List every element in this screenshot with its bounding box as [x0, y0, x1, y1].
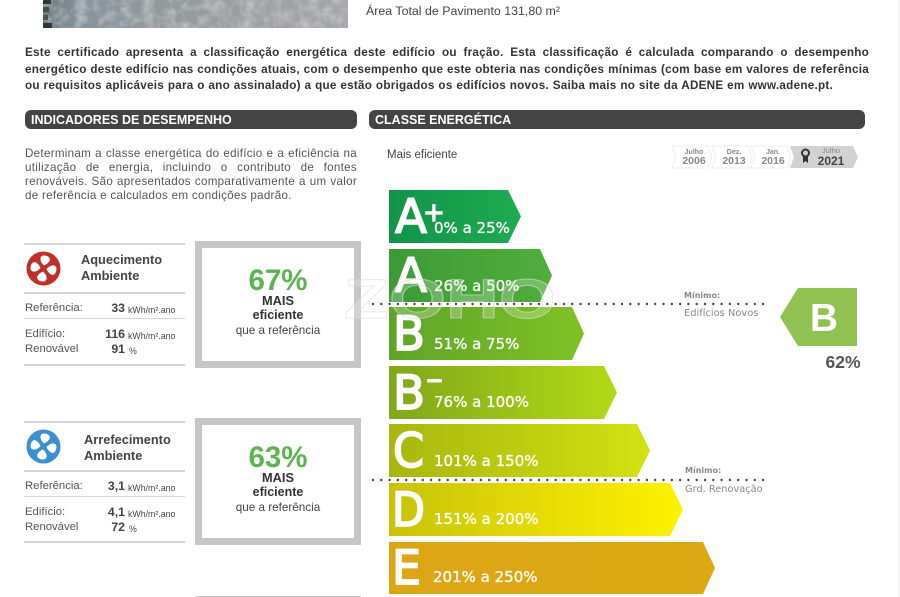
- building photo: [43, 0, 348, 28]
- description text: Determinam a classe energética do edifício e a eficiência na: [25, 147, 357, 160]
- heading: indicadores de desempenho: [25, 110, 357, 129]
- panel: aquecimento ambiente: 91: [111, 342, 125, 356]
- row: referência: Referência:: [25, 302, 83, 314]
- timeline of regulations: Julho: [685, 149, 703, 156]
- timeline of regulations: 2013: [722, 155, 746, 167]
- bar: A+: [389, 190, 521, 245]
- bar: A: [389, 249, 552, 304]
- heading: aquecimento: Aquecimento: [81, 252, 162, 267]
- bar: A: 26% a 50%: [434, 277, 519, 295]
- panel: aquecimento ambiente: %: [129, 346, 137, 356]
- panel: arrefecimento ambiente: 3,1: [108, 479, 125, 493]
- bar: E: [389, 541, 715, 596]
- current class badge: B: [780, 288, 857, 346]
- timeline of regulations: 2006: [682, 155, 706, 167]
- panel: arrefecimento ambiente: kWh/m².ano: [128, 483, 175, 493]
- marker: minimum new buildings: Mínimo:: [684, 291, 720, 300]
- current class badge: B: B: [810, 297, 838, 340]
- timeline of regulations: 2021: [818, 154, 845, 168]
- row: edifício: Edifício:: [25, 506, 65, 518]
- intro paragraph: ou requisitos aplicáveis para o ano assinalado) a que estão obrigados os edifícios novos. Saiba mais no site da ADENE em www.adene.pt.: [25, 79, 833, 92]
- callout: 63%: 63%: [248, 441, 308, 474]
- row: referência: Referência:: [25, 480, 83, 492]
- bar: C: [389, 424, 650, 479]
- bar: D: [389, 483, 683, 538]
- bar: B-: B: [393, 366, 425, 421]
- callout: 63%: eficiente: [253, 485, 303, 499]
- icon: blue fan: [26, 430, 60, 464]
- panel: aquecimento ambiente: kWh/m².ano: [128, 305, 175, 315]
- marker: minimum major renovation: Mínimo:: [685, 466, 721, 475]
- timeline of regulations: [672, 146, 858, 168]
- bar: D: D: [392, 483, 425, 538]
- panel: aquecimento ambiente: 33: [111, 301, 125, 315]
- callout: 67%: 67%: [248, 264, 308, 297]
- bar: C: 101% a 150%: [434, 452, 538, 470]
- callout: 67%: [195, 241, 361, 368]
- heading: arrefecimento: [84, 432, 171, 463]
- heading: indicadores de desempenho: INDICADORES DE DESEMPENHO: [31, 113, 232, 127]
- panel: aquecimento ambiente: [24, 241, 361, 368]
- icon: red fan: [26, 252, 60, 286]
- panel: aquecimento ambiente: 116: [105, 327, 125, 341]
- timeline of regulations: Julho: [822, 146, 840, 155]
- heading: aquecimento: Ambiente: [81, 268, 139, 283]
- bar: E: 201% a 250%: [433, 568, 538, 586]
- heading: aquecimento: [81, 252, 162, 283]
- description text: [25, 147, 357, 202]
- bar: E: E: [392, 541, 421, 596]
- timeline of regulations: 2016: [761, 155, 785, 167]
- callout: 63%: MAIS: [262, 470, 294, 485]
- marker: minimum major renovation: [373, 466, 765, 495]
- intro paragraph: [25, 46, 869, 92]
- current class percentage: 62%: [825, 352, 861, 372]
- total floor area: Área Total de Pavimento 131,80 m²: [366, 4, 560, 18]
- row: renovável: Renovável: [25, 521, 78, 533]
- panel: arrefecimento ambiente: 4,1: [108, 505, 125, 519]
- bar: B: 51% a 75%: [434, 335, 519, 353]
- marker: minimum major renovation: Grd. Renovação: [685, 484, 763, 495]
- bar: B-: 76% a 100%: [434, 393, 529, 411]
- bar: B: B: [393, 307, 425, 362]
- watermark: ZOHO: [344, 267, 556, 330]
- callout: 67%: eficiente: [253, 308, 303, 322]
- bar: A: A: [395, 249, 427, 304]
- description text: de referência e calculados em condições padrão.: [25, 189, 292, 202]
- bar: C: C: [393, 424, 424, 479]
- panel: arrefecimento ambiente: %: [129, 524, 137, 534]
- callout: 63%: que a referência: [236, 501, 320, 514]
- description text: renováveis. São apresentados comparativamente a um valor: [25, 175, 357, 188]
- bar: A+: 0% a 25%: [434, 219, 510, 237]
- bar: A+: +: [423, 198, 445, 228]
- callout: 63%: [195, 418, 361, 545]
- callout: 67%: que a referência: [236, 324, 320, 337]
- bar: A+: A: [395, 190, 427, 245]
- marker: minimum new buildings: Edifícios Novos: [684, 307, 758, 319]
- description text: utilização de energia, incluindo o contributo de fontes: [25, 161, 357, 174]
- intro paragraph: Este certificado apresenta a classificação energética deste edifício ou fração. Esta classificação é calculada comparando o desempenho: [25, 46, 869, 59]
- bar: B-: [389, 366, 617, 421]
- marker: minimum new buildings: [373, 291, 765, 319]
- timeline of regulations: Dez.: [727, 149, 741, 156]
- panel: arrefecimento ambiente: kWh/m².ano: [128, 509, 175, 519]
- panel: arrefecimento ambiente: [24, 418, 361, 545]
- bar: D: 151% a 200%: [434, 510, 538, 528]
- heading: arrefecimento: Ambiente: [84, 448, 142, 463]
- row: renovável: Renovável: [25, 343, 78, 355]
- heading: arrefecimento: Arrefecimento: [84, 432, 171, 447]
- row: edifício: Edifício:: [25, 328, 65, 340]
- heading: classe energética: [369, 110, 865, 129]
- bar: B: [389, 307, 584, 362]
- panel: aquecimento ambiente: kWh/m².ano: [128, 331, 175, 341]
- intro paragraph: energético deste edifício nas condições atuais, com o desempenho que este obteria nas condições mínimas (com base em valores de referência: [25, 62, 869, 76]
- callout: 67%: MAIS: [262, 293, 294, 308]
- label: mais eficiente: Mais eficiente: [387, 149, 457, 161]
- heading: classe energética: CLASSE ENERGÉTICA: [375, 113, 511, 127]
- panel: arrefecimento ambiente: 72: [111, 520, 125, 534]
- timeline of regulations: Jan.: [766, 149, 780, 156]
